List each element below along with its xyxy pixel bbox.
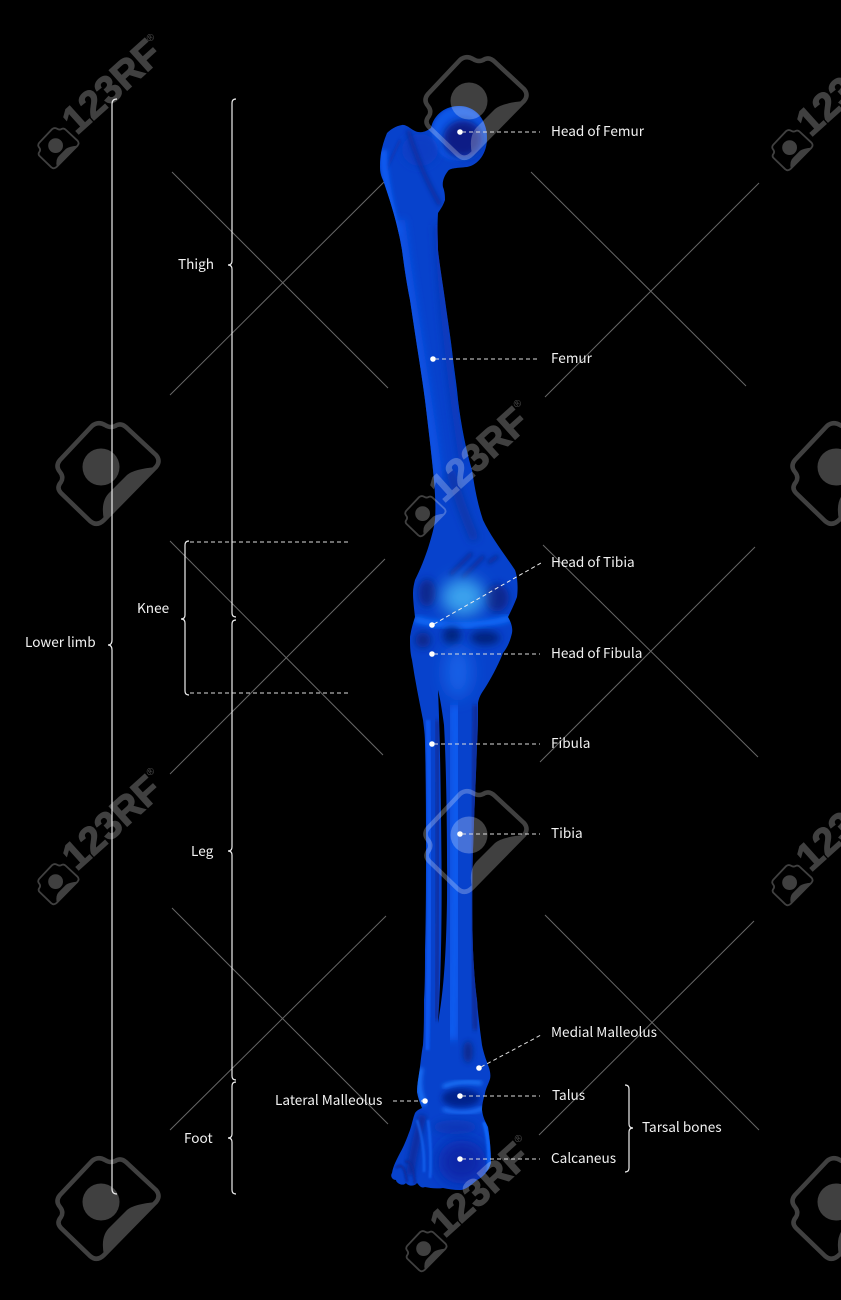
label: lower limb: Lower limb bbox=[25, 631, 96, 651]
label: leg: Leg bbox=[191, 840, 214, 860]
callout: head of tibia: Head of Tibia bbox=[551, 551, 635, 571]
callout: calcaneus bbox=[457, 1147, 616, 1167]
callout: medial malleolus: Medial Malleolus bbox=[551, 1021, 657, 1041]
femur shaft shading bbox=[400, 220, 438, 480]
label: tarsal bones: Tarsal bones bbox=[642, 1116, 722, 1136]
callout: calcaneus: Calcaneus bbox=[551, 1147, 616, 1167]
callout: talus bbox=[457, 1084, 585, 1104]
watermark: 123RF logos: 123RF bbox=[422, 1135, 538, 1245]
tibia and fibula shading bbox=[473, 705, 476, 1030]
callout: medial malleolus bbox=[476, 1021, 657, 1071]
callout: tibia: Tibia bbox=[551, 822, 583, 842]
gap between fibula and tibia bbox=[438, 690, 447, 1023]
label: knee: Knee bbox=[137, 597, 169, 617]
bracket: thigh bbox=[228, 99, 236, 617]
label: foot: Foot bbox=[184, 1127, 213, 1147]
callout: talus: Talus bbox=[552, 1084, 585, 1104]
watermark: 123RF logos: ® bbox=[145, 31, 158, 45]
bracket: tarsal bones bbox=[625, 1085, 633, 1172]
bracket: foot bbox=[228, 1082, 236, 1194]
bracket: lower limb bbox=[108, 99, 117, 1194]
callout: fibula: Fibula bbox=[551, 732, 590, 752]
callout: head of tibia bbox=[429, 551, 635, 628]
bone illustration: femur, tibia, fibula and foot bbox=[380, 106, 518, 1190]
callout: head of fibula bbox=[429, 642, 642, 662]
knee shading bbox=[414, 553, 511, 698]
callout: tibia bbox=[457, 822, 583, 842]
callout: femur bbox=[430, 347, 593, 367]
watermark: 123RF logos: 123RF bbox=[421, 400, 537, 510]
callout: femur: Femur bbox=[551, 347, 593, 367]
bracket: knee bbox=[181, 541, 189, 695]
watermark: 123RF logos: 123RF bbox=[54, 768, 170, 878]
callout: head of femur: Head of Femur bbox=[551, 120, 645, 140]
callout: head of fibula: Head of Fibula bbox=[551, 642, 642, 662]
watermark: 123RF logos: ® bbox=[513, 1132, 526, 1146]
callout: fibula bbox=[429, 732, 590, 752]
femur head shading bbox=[384, 107, 486, 235]
callout: head of femur bbox=[457, 120, 645, 140]
bracket: leg bbox=[228, 620, 236, 1080]
knee dashed boundary lines bbox=[190, 542, 348, 693]
watermark: 123RF logos: ® bbox=[145, 765, 158, 779]
diagonal watermark lines bbox=[170, 172, 759, 1135]
ankle shading bbox=[396, 1041, 489, 1184]
label: thigh: Thigh bbox=[178, 253, 214, 273]
watermark: 123RF logos: 123RF bbox=[54, 32, 170, 142]
callout: lateral malleolus: Lateral Malleolus bbox=[275, 1089, 382, 1109]
watermark: 123RF logos: ® bbox=[512, 397, 525, 411]
